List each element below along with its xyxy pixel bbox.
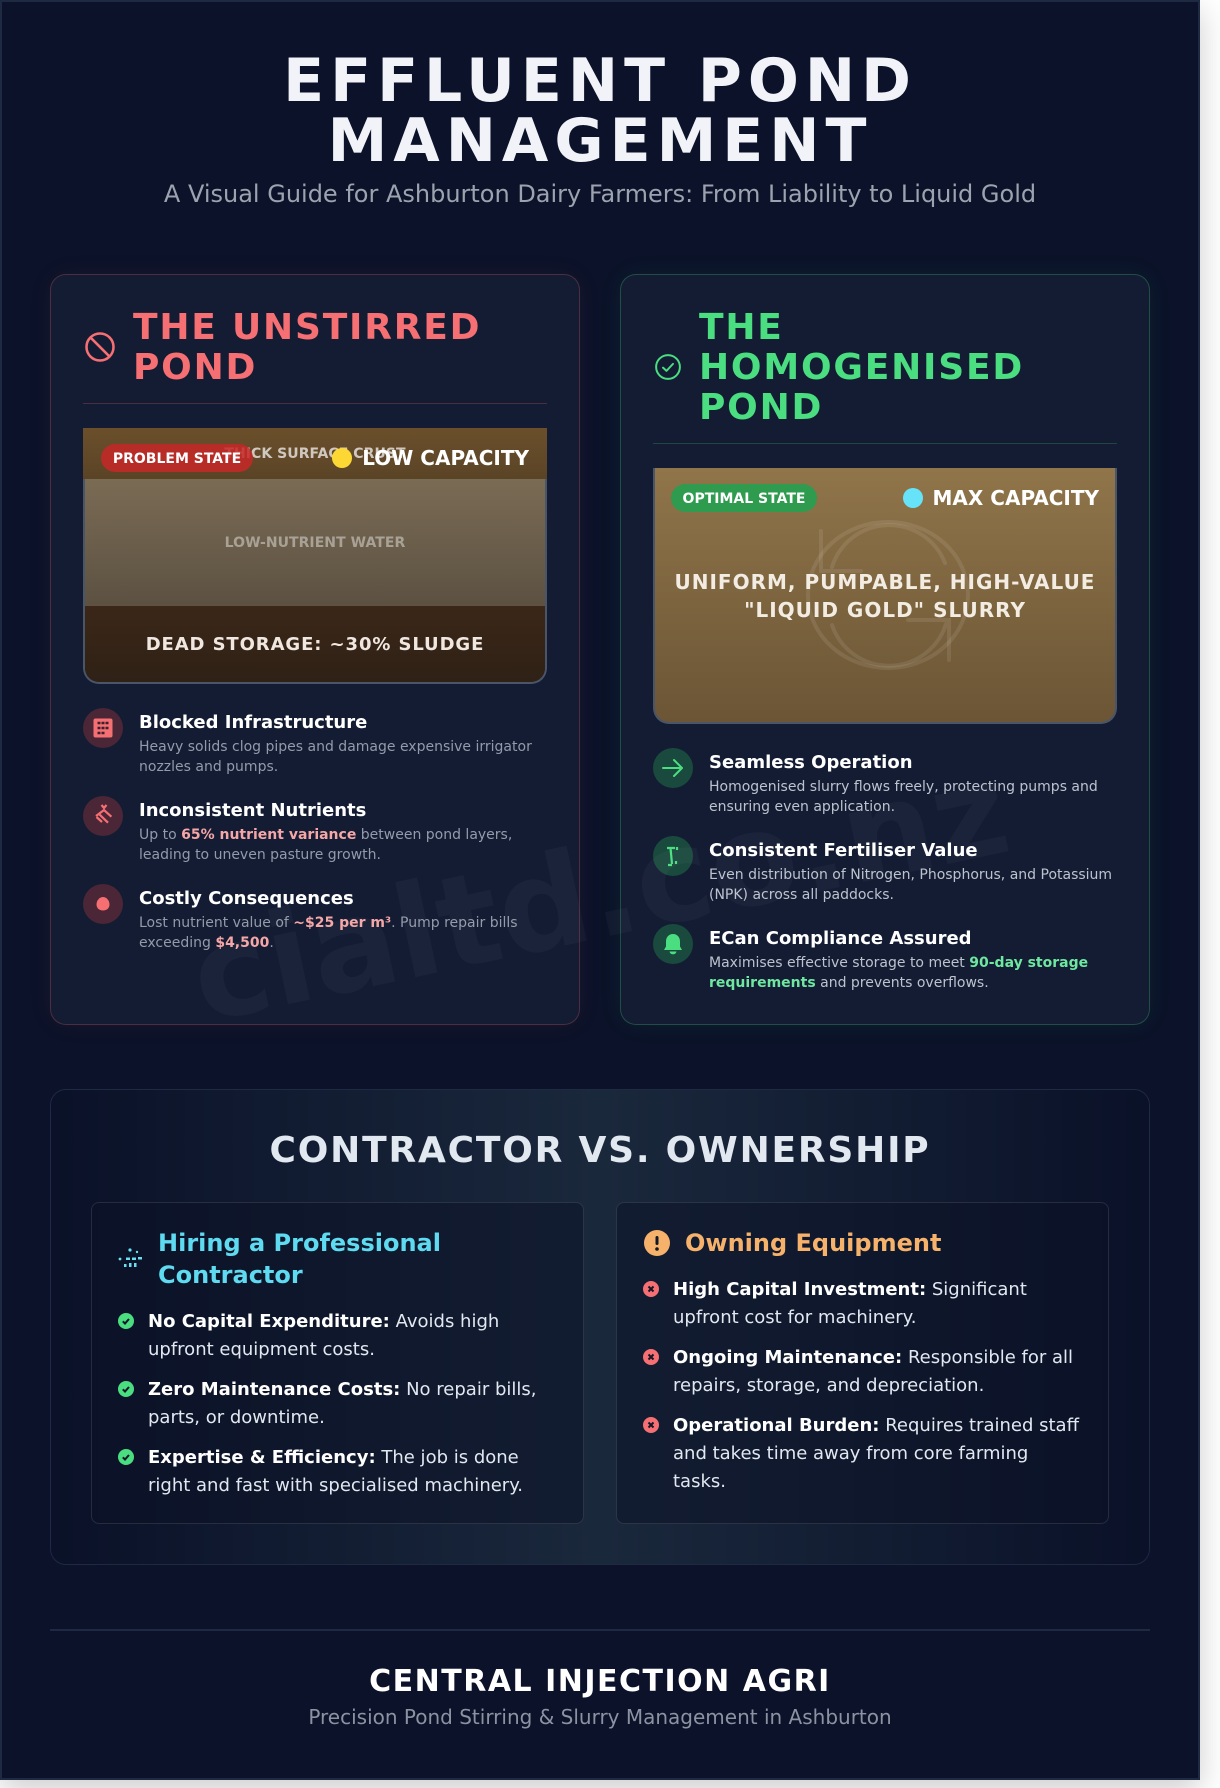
panel: the unstirred pond: [50, 274, 580, 1025]
icon: nutrients: [83, 796, 123, 836]
capacity label: MAX CAPACITY: [933, 486, 1099, 510]
title: MANAGEMENT: [328, 106, 872, 176]
item description: Lost nutrient value of ~$25 per m³. Pump repair bills: [139, 915, 518, 931]
header divider: [83, 403, 547, 404]
sludge layer: [85, 606, 545, 682]
card heading: Owning Equipment: [685, 1229, 941, 1257]
item description: [139, 739, 532, 775]
capacity dot: [332, 448, 352, 468]
icon: check: [118, 1449, 134, 1465]
item description: nozzles and pumps.: [139, 759, 278, 775]
icon: ban: [85, 332, 115, 362]
icon: fertiliser: [653, 836, 693, 876]
problem badge: PROBLEM STATE: [113, 451, 241, 467]
card heading: [158, 1229, 441, 1289]
list item: costly consequences: [83, 884, 518, 951]
title: EFFLUENT POND: [283, 46, 917, 116]
panel background: [50, 274, 580, 1025]
item description: Even distribution of Nitrogen, Phosphorus, and Potassium: [709, 867, 1112, 883]
icon: check: [118, 1381, 134, 1397]
item description: ensuring even application.: [709, 799, 895, 815]
section heading: CONTRACTOR VS. OWNERSHIP: [270, 1130, 930, 1171]
capacity label: LOW CAPACITY: [362, 446, 529, 470]
icon: cross: [643, 1281, 659, 1297]
heading: THE UNSTIRRED: [133, 307, 481, 348]
item description: exceeding $4,500.: [139, 935, 274, 951]
icon: cross: [643, 1349, 659, 1365]
header divider: [653, 443, 1117, 444]
crust layer: [83, 428, 547, 479]
heading: POND: [133, 347, 257, 388]
item text: [148, 1447, 523, 1496]
item description: [709, 867, 1112, 903]
footer divider: [50, 1629, 1150, 1631]
heading: [133, 307, 481, 388]
icon: sparkle: [118, 1248, 142, 1267]
optimal badge: OPTIMAL STATE: [683, 491, 805, 507]
problem badge: [101, 444, 253, 472]
item description: leading to uneven pasture growth.: [139, 847, 381, 863]
item text: [148, 1311, 499, 1360]
watermark: cialtd.co.nz: [179, 734, 1021, 1053]
item title: Costly Consequences: [139, 888, 354, 909]
item description: requirements and prevents overflows.: [709, 975, 989, 991]
item text: repairs, storage, and depreciation.: [673, 1375, 984, 1396]
item text: Operational Burden: Requires trained staff: [673, 1415, 1079, 1436]
icon: cross: [643, 1417, 659, 1433]
pro: expertise and efficiency: [118, 1447, 523, 1496]
card: owning equipment: [616, 1202, 1109, 1524]
item text: Expertise & Efficiency: The job is done: [148, 1447, 519, 1468]
pro: zero maintenance: [118, 1379, 536, 1428]
item text: No Capital Expenditure: Avoids high: [148, 1311, 499, 1332]
item title: Blocked Infrastructure: [139, 712, 367, 733]
footer tagline: Precision Pond Stirring & Slurry Management in Ashburton: [308, 1705, 892, 1729]
item text: parts, or downtime.: [148, 1407, 325, 1428]
item text: [673, 1279, 1027, 1328]
optimal badge: [671, 484, 817, 512]
item text: [148, 1379, 536, 1428]
item title: Seamless Operation: [709, 752, 913, 773]
pro: no capital expenditure: [118, 1311, 499, 1360]
capacity dot: [903, 488, 923, 508]
list item: blocked infrastructure: [83, 708, 532, 775]
panel: the homogenised pond: [620, 274, 1150, 1025]
item text: right and fast with specialised machinery.: [148, 1475, 523, 1496]
list item: inconsistent nutrients: [83, 796, 512, 863]
icon: check: [118, 1313, 134, 1329]
item title: ECan Compliance Assured: [709, 928, 972, 949]
slurry label: "LIQUID GOLD" SLURRY: [744, 598, 1026, 622]
item title: Consistent Fertiliser Value: [709, 840, 978, 861]
item description: (NPK) across all paddocks.: [709, 887, 894, 903]
card heading: Hiring a Professional: [158, 1229, 441, 1257]
heading: POND: [699, 387, 823, 428]
icon: costly: [83, 884, 123, 924]
panel: contractor vs ownership: [50, 1089, 1150, 1565]
subtitle: A Visual Guide for Ashburton Dairy Farmers: From Liability to Liquid Gold: [164, 180, 1036, 208]
icon: exclamation: [644, 1230, 670, 1256]
water layer: [85, 479, 545, 606]
heading: [699, 307, 1024, 428]
slurry label: [674, 570, 1095, 622]
item text: upfront equipment costs.: [148, 1339, 375, 1360]
list item: consistent fertiliser value: [653, 836, 1112, 903]
item text: [673, 1412, 1079, 1496]
con: ongoing maintenance: [643, 1347, 1073, 1396]
heading: HOMOGENISED: [699, 347, 1024, 388]
item text: High Capital Investment: Significant: [673, 1279, 1027, 1300]
item description: Maximises effective storage to meet 90-day storage: [709, 955, 1088, 971]
list item: seamless operation: [653, 748, 1098, 815]
item text: upfront cost for machinery.: [673, 1307, 916, 1328]
icon: stirring swirl: [806, 520, 970, 670]
con: high capital investment: [643, 1279, 1027, 1328]
icon: arrow: [653, 748, 693, 788]
pond diagram: [653, 468, 1117, 724]
item description: Heavy solids clog pipes and damage expensive irrigator: [139, 739, 532, 755]
icon: check circle: [655, 354, 681, 380]
item description: Homogenised slurry flows freely, protecting pumps and: [709, 779, 1098, 795]
water label: LOW-NUTRIENT WATER: [225, 535, 405, 551]
icon: blocked: [83, 708, 123, 748]
slurry label: UNIFORM, PUMPABLE, HIGH-VALUE: [674, 570, 1095, 594]
item description: [709, 779, 1098, 815]
item description: Up to 65% nutrient variance between pond layers,: [139, 827, 512, 843]
sludge label: DEAD STORAGE: ~30% SLUDGE: [146, 634, 484, 655]
pond diagram: [83, 428, 547, 684]
heading: THE: [699, 307, 784, 348]
crust label: THICK SURFACE CRUST: [224, 446, 406, 462]
icon: bell: [653, 924, 693, 964]
list item: ecan compliance: [653, 924, 1088, 991]
item text: Zero Maintenance Costs: No repair bills,: [148, 1379, 536, 1400]
item description: [139, 915, 518, 951]
item description: [139, 827, 512, 863]
card: hiring a professional contractor: [91, 1202, 584, 1524]
item text: Ongoing Maintenance: Responsible for all: [673, 1347, 1073, 1368]
footer brand: CENTRAL INJECTION AGRI: [369, 1664, 831, 1699]
item text: and takes time away from core farming: [673, 1443, 1028, 1464]
title: [283, 46, 917, 176]
item description: [709, 955, 1088, 991]
con: operational burden: [643, 1415, 1080, 1492]
item text: [673, 1347, 1073, 1396]
item title: Inconsistent Nutrients: [139, 800, 366, 821]
panel background: [620, 274, 1150, 1025]
item text: tasks.: [673, 1471, 726, 1492]
card heading: Contractor: [158, 1261, 303, 1289]
